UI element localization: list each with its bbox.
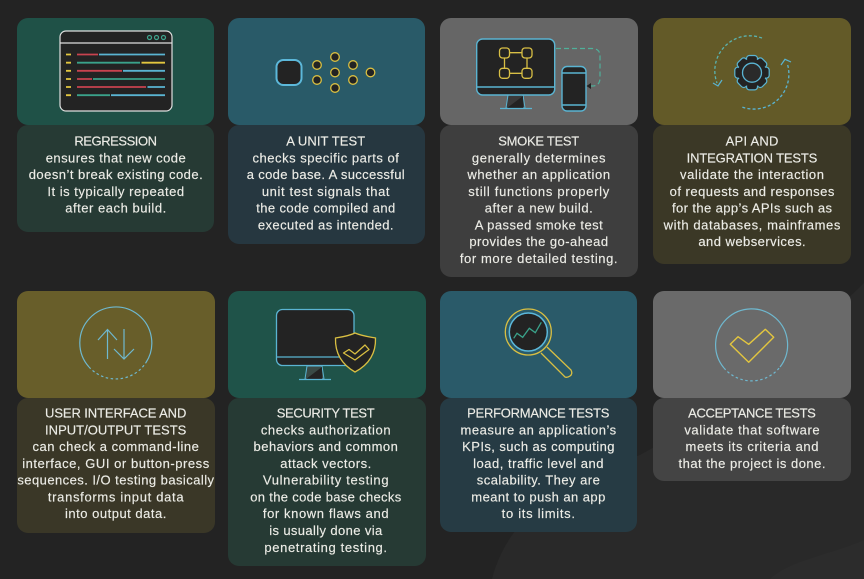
text: API description: for the app’s APIs such as	[672, 201, 832, 216]
icon: up and down arrows in circle	[80, 307, 152, 379]
text: acceptance description	[678, 422, 826, 471]
text: user interface description: transforms input data	[48, 489, 184, 504]
text: performance description: measure an application’s	[460, 422, 617, 437]
text: smoke test description: generally determines	[472, 150, 606, 165]
text: security description: on the code base checks	[250, 489, 402, 504]
text: security description: is usually done via	[269, 523, 383, 538]
text: smoke test description: still functions properly	[468, 184, 610, 199]
heading: acceptance tests: ACCEPTANCE TESTS	[688, 406, 816, 421]
heading: API and integration tests	[687, 134, 818, 165]
text: performance description: meant to push an app	[471, 489, 605, 504]
text: security description	[250, 422, 402, 555]
text: performance description: KPIs, such as computing	[462, 439, 614, 454]
text: API description: with databases, mainframes	[663, 217, 841, 232]
text: unit test description: unit test signals that	[262, 184, 390, 199]
text: unit test description: checks specific parts of	[253, 150, 399, 165]
text: user interface description	[17, 439, 215, 521]
heading: API and integration tests: INTEGRATION TESTS	[687, 150, 818, 165]
heading: unit test: A UNIT TEST	[286, 134, 365, 148]
text: API description: and webservices.	[698, 234, 806, 249]
heading: smoke test: SMOKE TEST	[498, 134, 579, 148]
text: security description: for known flaws and	[263, 506, 389, 521]
text: security description: behaviors and common	[254, 439, 398, 454]
text: smoke test description: for more detailed testing.	[460, 251, 618, 266]
panel: API and integration tests	[653, 18, 851, 264]
text: API description	[663, 167, 841, 249]
text: security description: checks authorization	[261, 422, 391, 437]
panel: security test	[228, 291, 426, 566]
text: performance description: scalability. They are	[477, 473, 600, 488]
text: user interface description: into output data.	[65, 506, 166, 521]
text: smoke test description: provides the go-ahead	[469, 234, 608, 249]
text: acceptance description: meets its criteria and	[686, 439, 818, 454]
panel: unit test	[228, 18, 425, 244]
text: security description: attack vectors.	[280, 456, 371, 471]
heading: performance tests: PERFORMANCE TESTS	[467, 406, 610, 421]
icon: code window	[60, 31, 172, 111]
heading: API and integration tests: API AND	[726, 134, 778, 148]
text: performance description	[460, 422, 617, 521]
text: regression description	[29, 150, 203, 216]
heading: user interface and input/output tests	[45, 406, 187, 437]
text: smoke test description: A passed smoke test	[475, 217, 603, 232]
panel: acceptance tests	[653, 291, 851, 481]
text: regression description: after each build.	[65, 201, 166, 216]
text: unit test description	[247, 150, 405, 232]
text: user interface description: can check a command-line	[33, 439, 199, 454]
icon: monitor and phone	[477, 39, 600, 111]
text: performance description: load, traffic level and	[473, 456, 603, 471]
heading: user interface and input/output tests: USER INTERFACE AND	[45, 406, 186, 421]
icon: monitor with shield	[276, 310, 376, 380]
heading: user interface and input/output tests: INPUT/OUTPUT TESTS	[45, 422, 187, 437]
text: API description: validate the interaction	[680, 167, 824, 182]
text: performance description: to its limits.	[502, 506, 575, 521]
text: user interface description: interface, GUI or button-press	[22, 456, 210, 471]
text: regression description: ensures that new code	[46, 150, 186, 165]
icon: magnifier with chart	[505, 309, 572, 377]
text: unit test description: the code compiled and	[256, 201, 395, 216]
heading: regression: REGRESSION	[74, 134, 157, 148]
text: security description: Vulnerability testing	[263, 473, 389, 488]
text: unit test description: a code base. A successful	[247, 167, 405, 182]
text: smoke test description: after a new build.	[485, 201, 593, 216]
heading: security test: SECURITY TEST	[277, 406, 375, 421]
text: smoke test description	[460, 150, 618, 266]
text: security description: penetrating testing.	[264, 540, 387, 555]
text: regression description: It is typically repeated	[47, 184, 184, 199]
text: API description: of requests and responses	[670, 184, 835, 199]
panel: performance tests	[440, 291, 637, 532]
text: user interface description: sequences. I/O testing basically	[17, 473, 215, 488]
icon: unit and dots	[276, 53, 375, 92]
text: unit test description: executed as intended.	[258, 217, 394, 232]
text: acceptance description: that the project is done.	[678, 456, 826, 471]
panel: smoke test	[440, 18, 638, 277]
text: smoke test description: whether an application	[466, 167, 610, 182]
text: regression description: doesn’t break existing code.	[29, 167, 203, 182]
panel: user interface and input/output tests	[17, 291, 215, 533]
panel: regression	[17, 18, 214, 232]
icon: check in circle	[716, 309, 788, 381]
icon: gear with arrows	[713, 36, 791, 109]
text: acceptance description: validate that software	[684, 422, 820, 437]
